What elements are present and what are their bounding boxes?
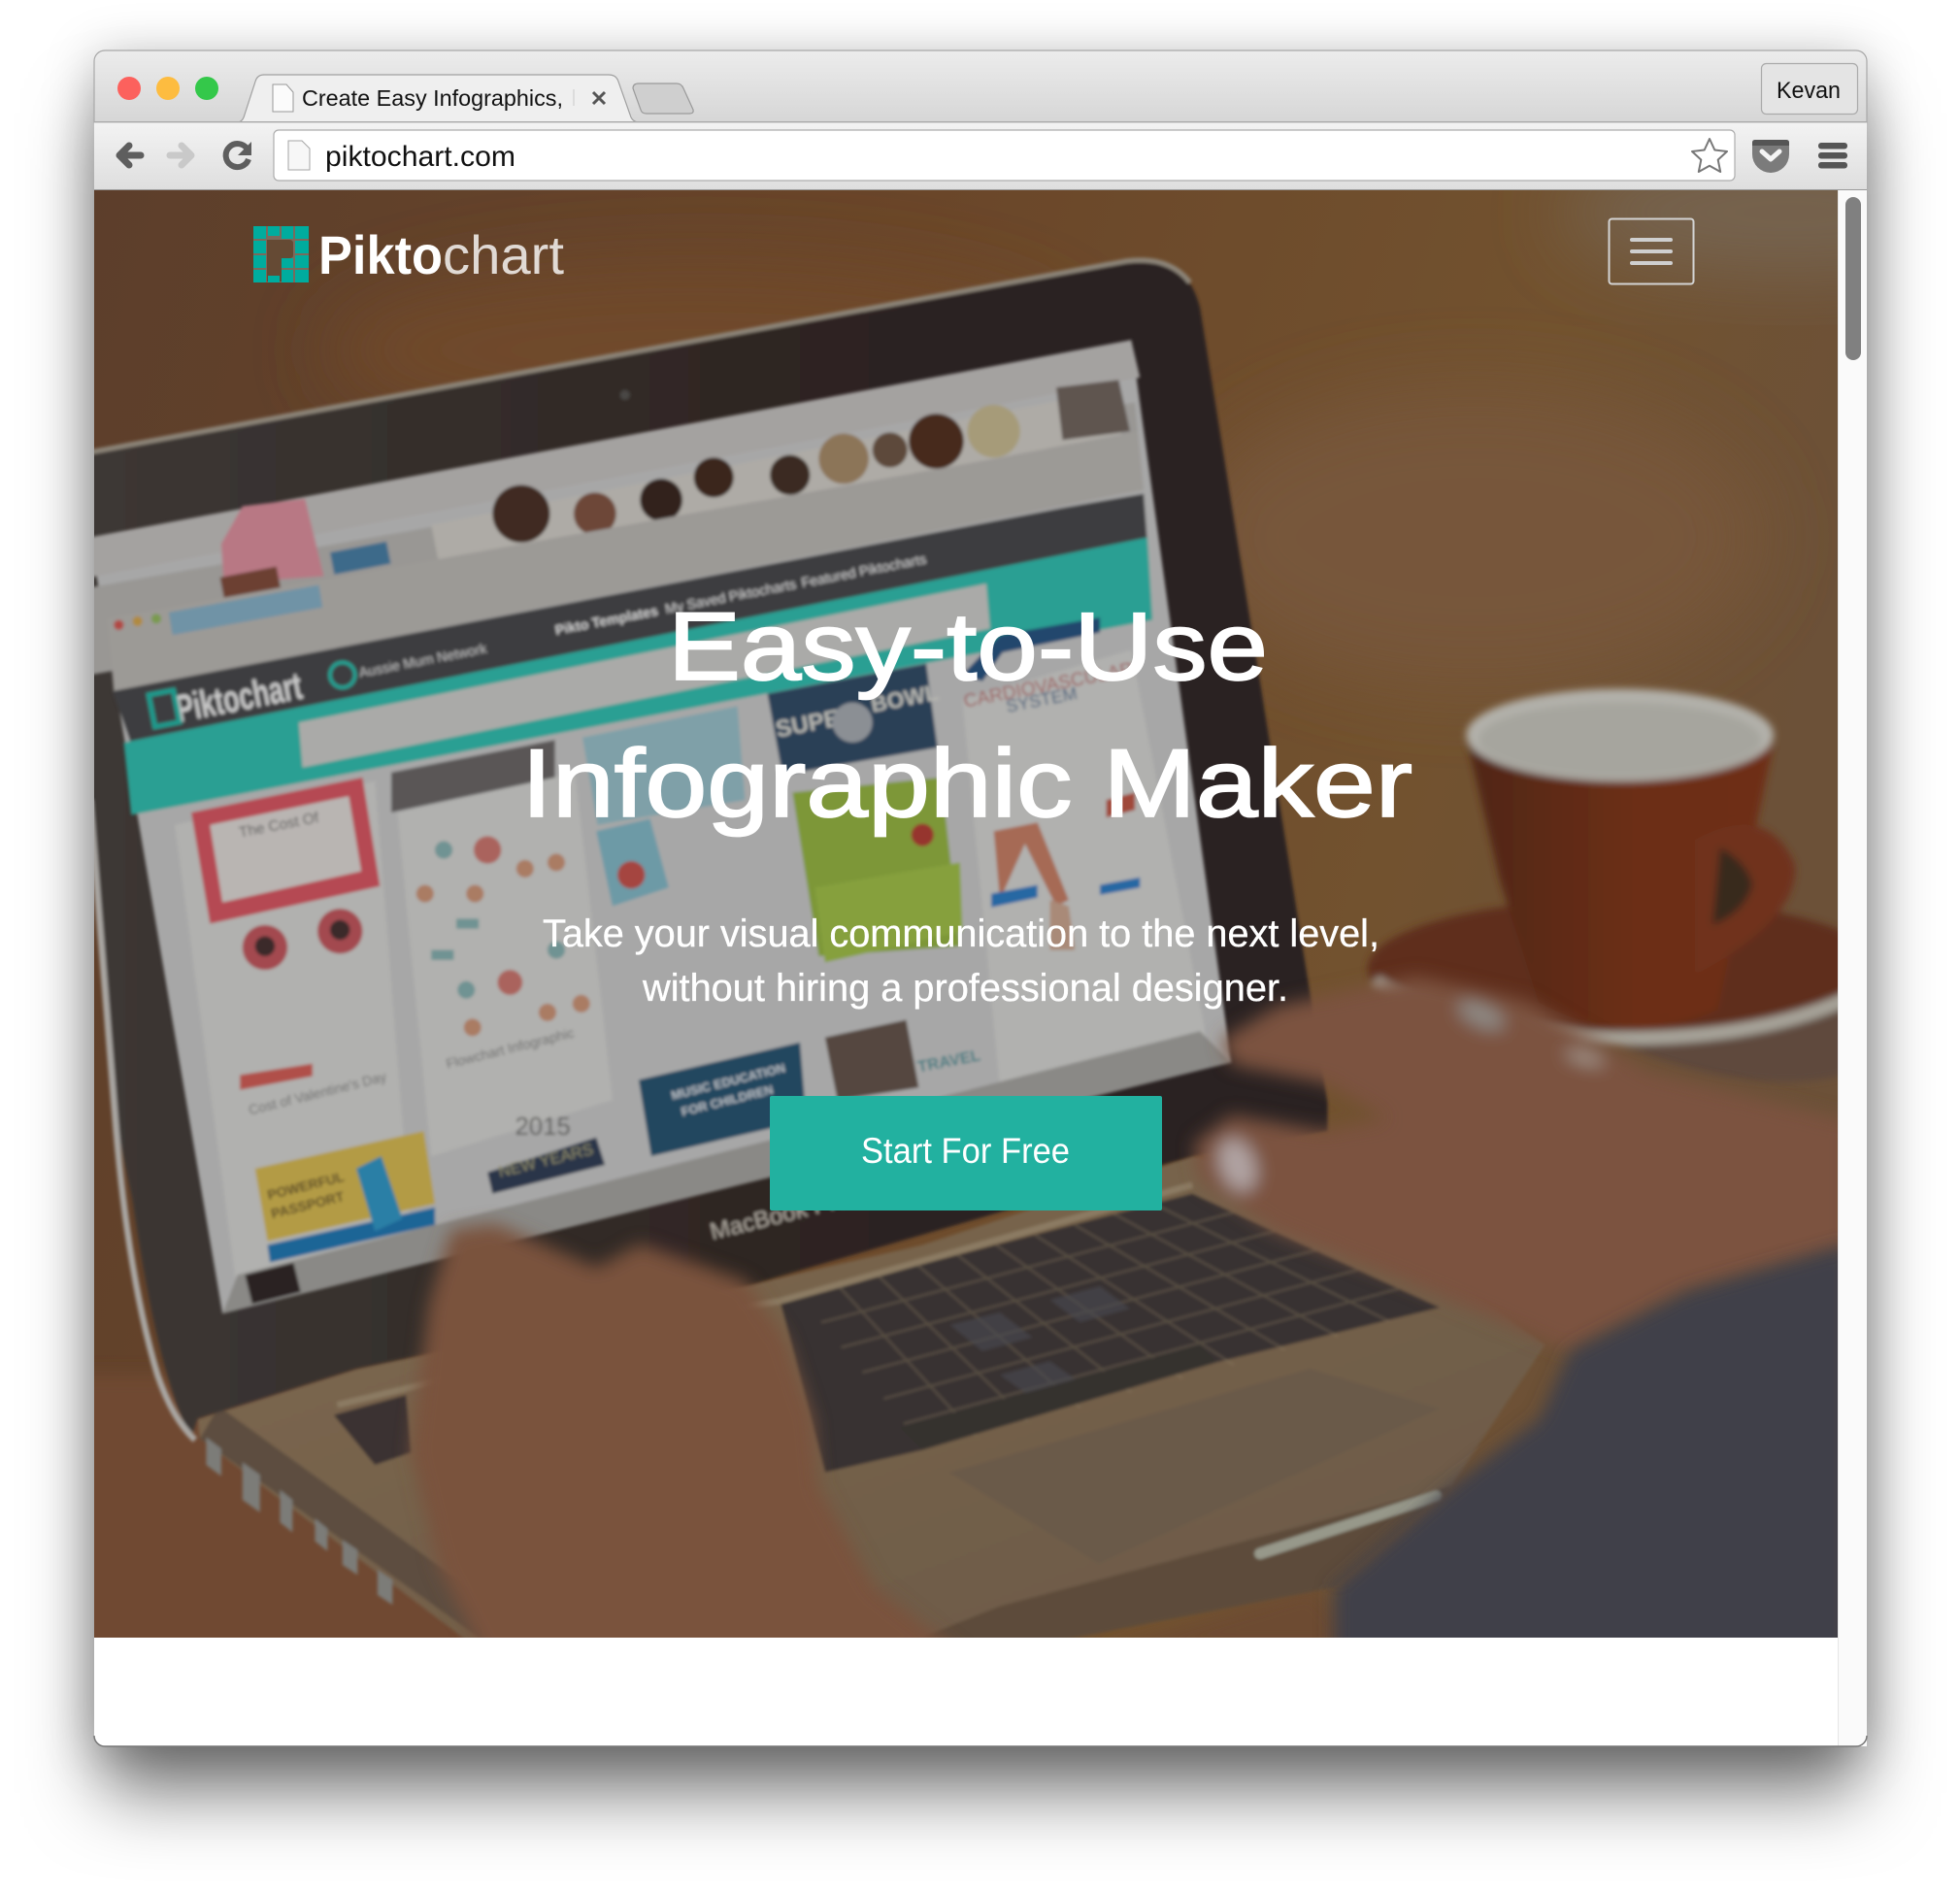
back arrow bbox=[119, 146, 141, 165]
dark navigation band: My Saved Piktocharts bbox=[664, 577, 797, 617]
template tiles: NEW YEARS bbox=[496, 1140, 595, 1181]
template tiles: The Cost Of bbox=[238, 810, 320, 842]
reload icon bbox=[226, 142, 251, 167]
template tiles bbox=[175, 650, 1231, 1313]
left hand bbox=[412, 1224, 964, 1656]
dark navigation band bbox=[113, 494, 1147, 755]
logo wordmark bbox=[318, 224, 564, 285]
template tiles: SYSTEM bbox=[1005, 683, 1079, 716]
start for free button: Start For Free bbox=[861, 1131, 1070, 1171]
hero photo background bbox=[94, 190, 1838, 1638]
second browser chrome bbox=[108, 431, 1144, 691]
keyboard bbox=[334, 1185, 1440, 1473]
wooden table bbox=[94, 190, 1838, 1638]
dark navigation band: Piktochart bbox=[172, 665, 306, 731]
active tab: Create Easy Infographics, bbox=[302, 85, 563, 111]
logo mark bbox=[253, 226, 309, 282]
chrome menu icon bbox=[1818, 143, 1847, 169]
window bottom edge bbox=[94, 1736, 1867, 1746]
scrollbar bbox=[1838, 190, 1867, 1746]
subheading: Take your visual communication to the next level, bbox=[543, 912, 1379, 955]
right hand bbox=[1194, 977, 1850, 1351]
address bar: piktochart.com bbox=[325, 141, 515, 173]
logo wordmark: Pikto bbox=[318, 224, 443, 285]
browser toolbar on screen bbox=[90, 340, 1140, 578]
bookmark thumbnails bbox=[220, 380, 1130, 600]
dark navigation band: Aussie Mum Network bbox=[358, 641, 489, 681]
pocket icon bbox=[1752, 140, 1789, 173]
template tiles: Flowchart Infographic bbox=[445, 1026, 576, 1073]
template tiles: Cost of Valentine's Day bbox=[248, 1069, 389, 1118]
logo wordmark: chart bbox=[443, 224, 564, 285]
forward arrow bbox=[170, 146, 191, 165]
title bar bbox=[94, 50, 1867, 122]
template tiles: FOR CHILDREN bbox=[680, 1082, 775, 1119]
template tiles: POWERFUL bbox=[266, 1170, 347, 1204]
main heading: Easy-to-Use bbox=[668, 592, 1268, 700]
template tiles: MUSIC EDUCATION bbox=[670, 1060, 786, 1103]
laptop lid bezel bbox=[75, 259, 1327, 1440]
port openings bbox=[206, 1438, 392, 1605]
profile button bbox=[1761, 64, 1858, 115]
main heading: Infographic Maker bbox=[521, 729, 1412, 837]
hamburger menu button bbox=[1610, 219, 1693, 283]
coffee cup and saucer bbox=[1368, 688, 1882, 1082]
light cards behind tiles bbox=[175, 650, 1207, 1294]
star icon bbox=[1692, 139, 1727, 172]
profile button: Kevan bbox=[1777, 78, 1841, 104]
start for free button bbox=[770, 1096, 1162, 1210]
main heading bbox=[521, 592, 1412, 837]
address bar bbox=[274, 130, 1735, 181]
inactive new tab button bbox=[633, 83, 693, 114]
trackpad bbox=[948, 1369, 1440, 1564]
template tiles: TRAVEL bbox=[916, 1046, 982, 1077]
template tiles: CARDIOVASCULAR bbox=[962, 659, 1135, 713]
dark navigation band: Featured Piktocharts bbox=[800, 551, 928, 591]
laptop lid bezel: MacBook Pro bbox=[708, 1185, 852, 1245]
template tiles: PASSPORT bbox=[270, 1189, 347, 1222]
laptop base bbox=[197, 1156, 1545, 1656]
dark navigation band: Pikto Templates bbox=[554, 604, 659, 639]
traffic light buttons bbox=[117, 77, 218, 100]
subheading: without hiring a professional designer. bbox=[642, 967, 1288, 1010]
template tiles: SUPER bbox=[774, 702, 859, 744]
template tiles: 2015 bbox=[515, 1113, 571, 1141]
active tab bbox=[237, 75, 640, 122]
subheading bbox=[543, 912, 1379, 1010]
toolbar bbox=[94, 121, 1867, 191]
piktochart logo bbox=[253, 224, 564, 285]
teal search band bbox=[123, 538, 1152, 815]
template tiles: BOWL bbox=[869, 680, 941, 717]
shirt sleeve bbox=[1334, 1243, 1850, 1656]
laptop screen bbox=[90, 340, 1231, 1313]
